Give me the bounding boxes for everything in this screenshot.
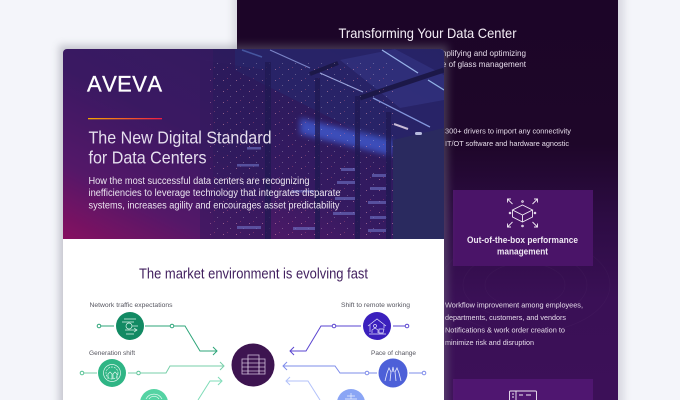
icon: generation shift — [98, 359, 126, 387]
workflow text: departments, customers, and vendors — [445, 313, 566, 322]
icon: central data center — [232, 344, 274, 386]
diagram: market forces — [80, 303, 426, 400]
back page intro text: single pane of glass management — [405, 60, 527, 69]
icon: open box with arrows — [508, 199, 538, 227]
section heading: The market environment is evolving fast — [139, 266, 368, 282]
icon: network traffic — [116, 312, 144, 340]
hero image: data center racks — [63, 49, 444, 239]
hero title — [88, 128, 272, 168]
icon: third blue factor — [337, 389, 365, 400]
back page intro text — [405, 49, 527, 69]
hero description — [88, 176, 341, 212]
box title — [467, 235, 578, 256]
connector: pace of change — [283, 362, 426, 375]
server racks — [200, 164, 265, 239]
label: pace of change: Pace of change — [371, 351, 417, 357]
connector: network traffic — [97, 324, 217, 355]
rack light strips — [237, 147, 386, 232]
hero description: How the most successful data centers are recognizing — [88, 176, 310, 187]
hero description: systems, increases agility and encourages asset predictability — [88, 200, 340, 212]
icon: calculator — [510, 391, 536, 400]
label: shift to remote working: Shift to remote working — [341, 303, 410, 309]
workflow text: minimize risk and disruption — [445, 338, 534, 347]
logo: AVEVA — [87, 72, 162, 96]
back page intro text: Simplifying and optimizing — [432, 49, 526, 58]
label: network traffic: Network traffic expectations — [90, 303, 172, 309]
back page heading: Transforming Your Data Center — [338, 25, 517, 41]
icon: remote working — [363, 312, 391, 340]
left shade — [63, 49, 213, 239]
blue glow — [300, 118, 392, 156]
box title: management — [497, 246, 548, 256]
workflow text: Workflow improvement among employees, — [445, 300, 583, 310]
connectivity text: 300+ drivers to import any connectivity — [445, 126, 571, 136]
ceiling — [235, 49, 444, 140]
panel: back page — [233, 0, 624, 400]
accent line — [88, 118, 162, 119]
connectivity text: IT/OT software and hardware agnostic — [445, 139, 569, 148]
hero title: for Data Centers — [88, 148, 207, 168]
workflow text: Notifications & work order creation to — [445, 326, 565, 334]
hero title: The New Digital Standard — [88, 128, 272, 148]
label: generation shift: Generation shift — [89, 351, 135, 357]
workflow text — [445, 300, 583, 347]
connector: generation shift — [80, 362, 224, 375]
panel: second feature box — [453, 379, 593, 400]
right cabinet — [393, 128, 444, 239]
connector: third green factor — [198, 377, 222, 400]
connector: remote working — [290, 324, 409, 355]
icon: pace of change — [378, 358, 408, 388]
connectivity text — [445, 126, 571, 148]
panel: out-of-the-box performance — [453, 190, 593, 266]
rack uprights — [265, 62, 391, 239]
panel: front page — [59, 45, 448, 400]
hero description: inefficiencies to leverage technology that integrates disparate — [88, 188, 341, 199]
icon: third green factor — [140, 389, 168, 400]
box title: Out-of-the-box performance — [467, 235, 578, 245]
connector: third blue factor — [286, 377, 320, 400]
